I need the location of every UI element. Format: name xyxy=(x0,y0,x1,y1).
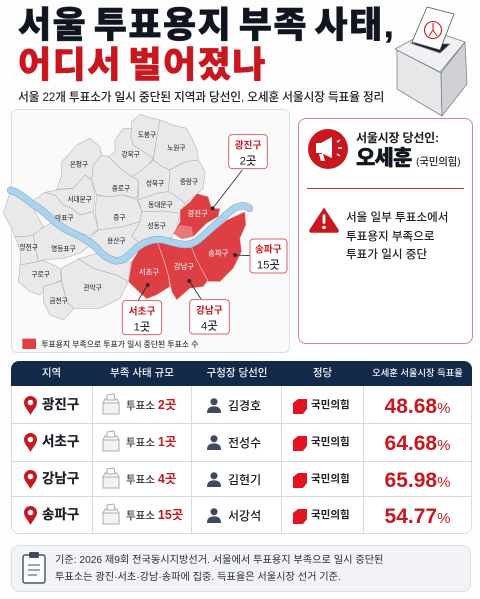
icon: ballot box xyxy=(394,6,468,116)
callout: 서초구 xyxy=(122,301,162,335)
icon: pin xyxy=(24,470,37,489)
winner label: 서울시장 당선인: xyxy=(356,131,439,145)
district labels: 양천구 xyxy=(19,243,38,252)
warning text: 투표가 일시 중단 xyxy=(346,248,427,261)
chart: Seoul district map xyxy=(3,114,288,349)
icon: person xyxy=(207,472,221,487)
map legend: 투표용지 부족으로 투표가 일시 중단된 투표소 수 xyxy=(41,339,198,349)
district labels: 성북구 xyxy=(146,178,164,187)
icon: person xyxy=(207,435,221,450)
row: 서초구: 서초구 xyxy=(42,434,79,449)
icon: ballot box xyxy=(102,393,120,414)
text: 오세훈 서울시장 득표율 xyxy=(372,368,463,378)
row: 서초구: 전성수 xyxy=(228,436,261,450)
subtitle: 서울 22개 투표소가 일시 중단된 지역과 당선인, 오세훈 서울시장 득표율 정리 xyxy=(18,90,384,104)
text: 지역 xyxy=(42,367,61,379)
district labels xyxy=(19,130,198,305)
icon: ballot box xyxy=(102,430,120,452)
icon: pin xyxy=(24,433,37,452)
row: 광진구: 투표소 2곳 xyxy=(126,398,176,412)
row: 송파구: 국민의힘 xyxy=(311,509,350,521)
icon: ballot box xyxy=(102,503,120,524)
row: 송파구: 54.77% xyxy=(385,505,450,528)
callout: 강남구: 4곳 xyxy=(201,321,218,333)
district labels: 노원구 xyxy=(167,143,186,152)
row: 송파구: 투표소 15곳 xyxy=(126,508,183,522)
row: 송파구 xyxy=(24,503,450,528)
icon: party xyxy=(293,473,307,488)
row: 서초구 xyxy=(24,430,450,455)
icon: person xyxy=(207,398,221,413)
winner party: (국민의힘) xyxy=(416,156,460,168)
callout: 강남구 xyxy=(190,300,229,334)
callout: 광진구: 2곳 xyxy=(240,155,256,167)
text: 정당 xyxy=(313,367,332,379)
callout leaders xyxy=(138,170,250,300)
text: 구청장 당선인 xyxy=(207,367,267,379)
icon: pin xyxy=(24,396,37,415)
river xyxy=(11,190,249,261)
footnote panel xyxy=(11,545,471,592)
icon: pin xyxy=(24,506,37,525)
row: 광진구: 광진구 xyxy=(42,397,79,412)
district labels: 금천구 xyxy=(49,296,68,305)
row: 강남구 xyxy=(24,467,450,492)
district labels: 동대문구 xyxy=(148,200,173,209)
title: 서울 투표용지 부족 사태, xyxy=(18,4,395,45)
chart: Seoul district map: 서초구 xyxy=(139,268,159,277)
text: 부족 사태 규모 xyxy=(110,367,174,379)
footnote text: 기준: 2026 제9회 전국동시지방선거. 서울에서 투표용지 부족으로 일시 중단된 xyxy=(55,555,383,566)
callout: 송파구: 15곳 xyxy=(257,260,280,272)
row: 강남구: 65.98% xyxy=(385,469,450,492)
callout: 서초구: 서초구 xyxy=(129,305,155,317)
district labels: 마표구 xyxy=(55,213,74,222)
icon: party xyxy=(293,436,307,451)
icon: person xyxy=(207,508,221,523)
highlighted districts xyxy=(128,193,246,300)
district labels: 서대문구 xyxy=(67,194,92,203)
winner name: 오세훈 xyxy=(356,147,412,170)
footnote text: 투표소는 광진·서초·강남·송파에 집중. 득표율은 서울시장 선거 기준. xyxy=(55,572,341,583)
row: 서초구: 64.68% xyxy=(385,432,450,455)
title line 2: 어디서 벌어졌나 xyxy=(18,44,267,85)
district labels: 중랑구 xyxy=(180,177,198,186)
district labels: 성동구 xyxy=(147,221,166,230)
footnote text xyxy=(55,554,383,583)
row: 광진구: 국민의힘 xyxy=(311,399,350,411)
row: 서초구: 투표소 1곳 xyxy=(126,435,176,449)
warning text: 서울 일부 투표소에서 xyxy=(346,211,448,224)
callout: 강남구: 강남구 xyxy=(196,304,223,316)
district labels: 구로구 xyxy=(31,271,50,279)
callout: 광진구 xyxy=(229,135,267,169)
table header xyxy=(11,361,472,386)
icon: party xyxy=(293,509,307,524)
row: 강남구: 강남구 xyxy=(42,471,79,486)
district labels: 강북구 xyxy=(121,149,140,158)
callout: 송파구: 송파구 xyxy=(255,244,282,255)
district labels: 관악구 xyxy=(83,283,102,292)
row: 광진구: 김경호 xyxy=(228,399,261,413)
district labels: 도봉구 xyxy=(138,130,156,139)
row: 광진구: 48.68% xyxy=(385,395,450,418)
warning text: 투표용지 부족으로 xyxy=(346,230,435,243)
row: 강남구: 투표소 4곳 xyxy=(126,472,176,486)
row: 강남구: 김현기 xyxy=(228,473,261,487)
callout: 광진구: 광진구 xyxy=(235,139,261,151)
callout: 송파구 xyxy=(250,239,287,273)
table xyxy=(11,361,472,534)
callout: 서초구: 1곳 xyxy=(134,321,150,333)
icon: ballot box xyxy=(102,467,120,488)
chart: Seoul district map: 강남구 xyxy=(174,262,194,271)
row: 송파구: 서강석 xyxy=(228,509,261,523)
panel: map xyxy=(11,109,290,353)
warning text xyxy=(346,211,448,261)
panel: winner xyxy=(298,118,473,344)
district labels: 용산구 xyxy=(107,236,126,245)
district labels: 종로구 xyxy=(112,185,130,193)
icon: clipboard xyxy=(22,552,46,584)
icon: party xyxy=(293,399,307,414)
row: 송파구: 송파구 xyxy=(42,507,79,522)
chart: Seoul district map: 송파구 xyxy=(208,249,229,258)
district labels: 중구 xyxy=(113,214,125,222)
icon: warning triangle xyxy=(309,208,339,233)
row: 광진구 xyxy=(24,393,450,418)
row: 강남구: 국민의힘 xyxy=(311,473,350,485)
chart: Seoul district map: 광진구 xyxy=(188,209,208,218)
icon: megaphone xyxy=(308,129,348,169)
row: 서초구: 국민의힘 xyxy=(311,436,350,448)
district labels: 은평구 xyxy=(70,160,88,169)
district labels: 영등표구 xyxy=(51,244,76,253)
